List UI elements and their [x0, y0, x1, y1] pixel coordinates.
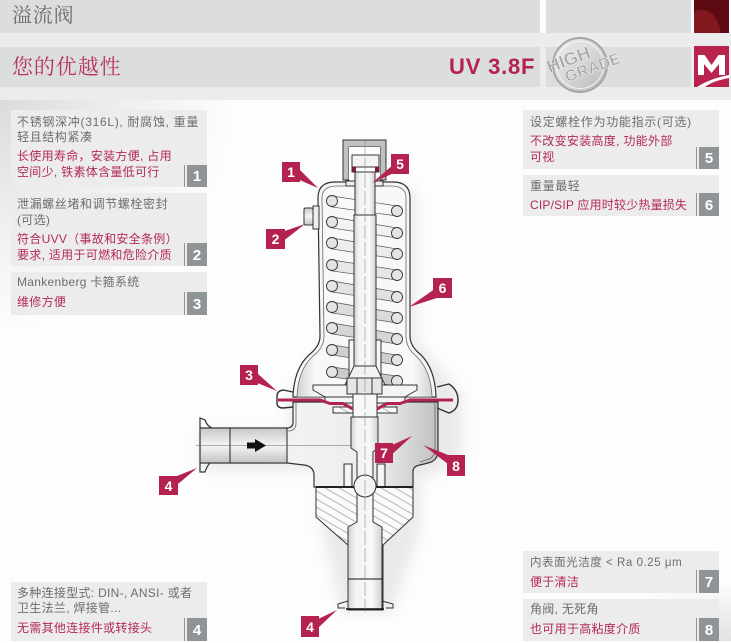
label 4 outlet	[301, 610, 337, 637]
label 1	[282, 162, 318, 188]
icon: high grade badge: HIGH	[545, 43, 593, 77]
panel: feature 6	[523, 175, 719, 216]
label 5: 5	[396, 156, 404, 172]
red diaphragm	[278, 400, 453, 409]
flange clamps	[277, 384, 458, 413]
panel: feature 1	[11, 110, 207, 187]
feature 4 benefit: 无需其他连接件或转接头	[17, 621, 152, 635]
label 2: 2	[272, 231, 280, 247]
feature 8 description: 角阀, 无死角	[530, 602, 599, 616]
valve body lower	[196, 402, 438, 487]
label 8: 8	[452, 458, 460, 474]
label 4 outlet: 4	[306, 619, 314, 635]
panel: feature 2	[11, 193, 207, 266]
label 7	[375, 436, 412, 463]
number tag 4	[187, 618, 207, 641]
feature 6 description: 重量最轻	[530, 179, 580, 193]
number tag 5: 5	[705, 150, 713, 167]
label 8	[423, 445, 465, 476]
feature 5 benefit: 不改变安装高度, 功能外部	[530, 134, 673, 148]
number tag 7	[699, 570, 719, 593]
number tag 3: 3	[193, 296, 201, 313]
panel: feature 4	[11, 582, 207, 641]
label 2	[266, 224, 305, 249]
divider 2	[184, 243, 185, 266]
top band	[0, 33, 731, 100]
feature 3 benefit: 维修方便	[17, 295, 66, 309]
feature 3 description: Mankenberg 卡箍系统	[17, 275, 140, 289]
number tag 2: 2	[193, 247, 201, 264]
icon: high grade badge	[545, 37, 623, 93]
label 4 inlet	[159, 468, 197, 495]
feature 2 description continued: (可选)	[17, 213, 50, 227]
number tag 5	[699, 147, 719, 169]
panel: feature 5	[523, 110, 719, 169]
panel: feature 3	[11, 272, 207, 315]
feature 1 benefit: 长使用寿命，安装方便, 占用	[17, 149, 172, 163]
divider 1	[184, 165, 185, 187]
number tag 1: 1	[193, 168, 201, 185]
heading: advantages: 您的优越性	[12, 51, 122, 81]
label 6: 6	[439, 280, 447, 296]
panel: feature 7	[523, 551, 719, 593]
label 4 inlet: 4	[165, 478, 173, 494]
number tag 8	[699, 618, 719, 641]
label 3: 3	[245, 367, 253, 383]
feature 2 benefit: 符合UVV（事故和安全条例）	[17, 232, 178, 246]
feature 1 benefit continued: 空间少, 铁素体含量低可行	[17, 165, 160, 179]
number tag 6	[699, 193, 719, 216]
header bar: advantages	[0, 47, 540, 87]
icon: Mankenberg logo	[694, 46, 729, 87]
feature 8 benefit: 也可用于高粘度介质	[530, 622, 641, 636]
header bar: product type	[0, 0, 540, 33]
number tag 1	[187, 165, 207, 187]
label 6	[409, 278, 452, 307]
divider 7	[696, 570, 697, 593]
valve stem	[344, 417, 385, 504]
feature 2 description: 泄漏螺丝堵和调节螺栓密封	[17, 197, 168, 211]
top cap and adjusting bolt	[343, 140, 386, 378]
feature 5 description: 设定螺栓作为功能指示(可选)	[530, 115, 692, 129]
number tag 4: 4	[193, 622, 201, 639]
spring bonnet	[293, 182, 436, 397]
feature 2 benefit continued: 要求, 适用于可燃和危险介质	[17, 248, 172, 262]
divider 8	[696, 618, 697, 641]
corner tile dark red	[694, 0, 729, 33]
feature 7 description: 内表面光洁度 < Ra 0.25 μm	[530, 557, 682, 569]
header bar: right segment	[546, 0, 691, 33]
feature 4 description: 多种连接型式: DIN-, ANSI- 或者	[17, 586, 192, 600]
number tag 6: 6	[705, 197, 713, 214]
spring seat and nut	[313, 366, 417, 417]
heading: model number: UV 3.8F	[449, 54, 535, 79]
number tag 8: 8	[705, 622, 713, 639]
number tag 3	[187, 292, 207, 315]
divider 5	[696, 147, 697, 169]
number tag 7: 7	[705, 574, 713, 591]
vent plug	[304, 206, 319, 229]
label 7: 7	[380, 445, 388, 461]
feature 6 benefit: CIP/SIP 应用时较少热量损失	[530, 198, 687, 212]
coil spring	[326, 196, 402, 386]
feature 1 description: 不锈钢深冲(316L), 耐腐蚀, 重量	[17, 115, 199, 129]
feature 5 benefit continued: 可视	[530, 150, 555, 164]
label 5	[372, 154, 409, 183]
label 1: 1	[287, 164, 295, 180]
divider 3	[184, 292, 185, 315]
header bar: badge segment	[546, 47, 691, 87]
icon: high grade badge: GRADE	[563, 50, 623, 86]
panel: feature 8	[523, 599, 719, 641]
number tag 2	[187, 243, 207, 266]
soft shadow behind valve	[200, 190, 462, 612]
divider 6	[696, 193, 697, 216]
feature 4 description continued: 卫生法兰, 焊接管...	[17, 601, 121, 615]
divider 4	[184, 618, 185, 641]
lower body hatched block	[316, 140, 413, 612]
feature 7 benefit: 便于清洁	[530, 575, 579, 589]
label 3	[240, 365, 277, 391]
feature 1 description continued: 轻且结构紧凑	[17, 130, 93, 144]
